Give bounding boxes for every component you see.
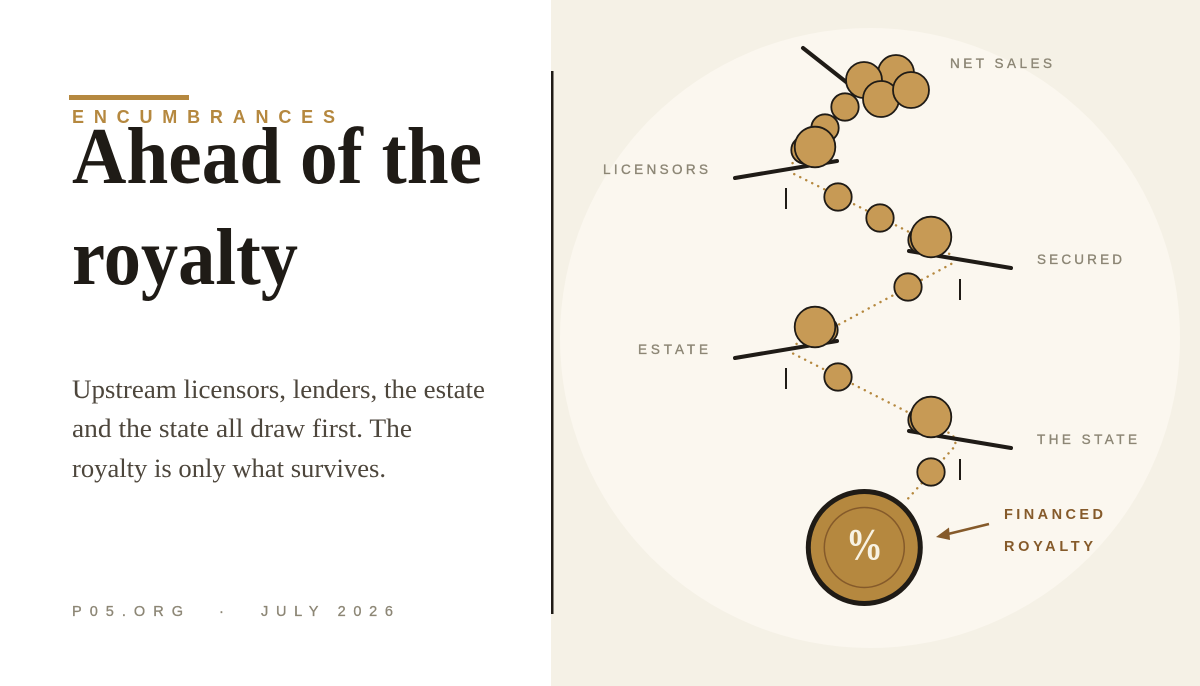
- footer: [72, 604, 393, 620]
- body text: Upstream licensors, lenders, the estate: [72, 374, 485, 404]
- ramp: the state: [908, 397, 1011, 480]
- label: secured: SECURED: [1037, 252, 1122, 267]
- ball: secured to estate: [894, 273, 922, 301]
- panel: diagram background: [551, 0, 1200, 686]
- label: net sales: NET SALES: [950, 56, 1052, 71]
- body text: [72, 374, 485, 483]
- title: royalty: [72, 214, 298, 302]
- label: financed royalty: ROYALTY: [1004, 539, 1093, 555]
- label: licensors: LICENSORS: [603, 162, 708, 177]
- ramp: estate: [735, 307, 838, 389]
- body text: royalty is only what survives.: [72, 453, 386, 483]
- balls: licensors to secured: [824, 183, 894, 232]
- backdrop circle: [560, 28, 1180, 648]
- ball: state to royalty: [917, 458, 945, 486]
- ramp: licensors: [735, 127, 837, 209]
- label: the state: THE STATE: [1037, 432, 1137, 447]
- accent bar: [69, 95, 189, 100]
- eyebrow: encumbrances: ENCUMBRANCES: [72, 107, 335, 127]
- body text: and the state all draw first. The: [72, 413, 412, 443]
- coin: financed royalty: [808, 492, 920, 604]
- ball: estate to state: [824, 363, 852, 391]
- vertical divider: [551, 71, 554, 614]
- coin: financed royalty: %: [846, 520, 883, 569]
- ramp: secured: [908, 217, 1011, 300]
- footer: P05.ORG: [72, 604, 183, 620]
- arrow: to coin: [936, 524, 989, 540]
- dotted ball path: [791, 150, 956, 502]
- label: financed royalty: FINANCED: [1004, 507, 1103, 523]
- footer: ·: [219, 604, 224, 620]
- label: financed royalty: [1004, 507, 1103, 555]
- title: [72, 113, 482, 302]
- chute: top: [803, 48, 850, 85]
- footer: JULY 2026: [261, 604, 393, 620]
- label: estate: ESTATE: [638, 342, 708, 357]
- balls: cluster at top: [811, 55, 929, 142]
- title: Ahead of the: [72, 113, 482, 201]
